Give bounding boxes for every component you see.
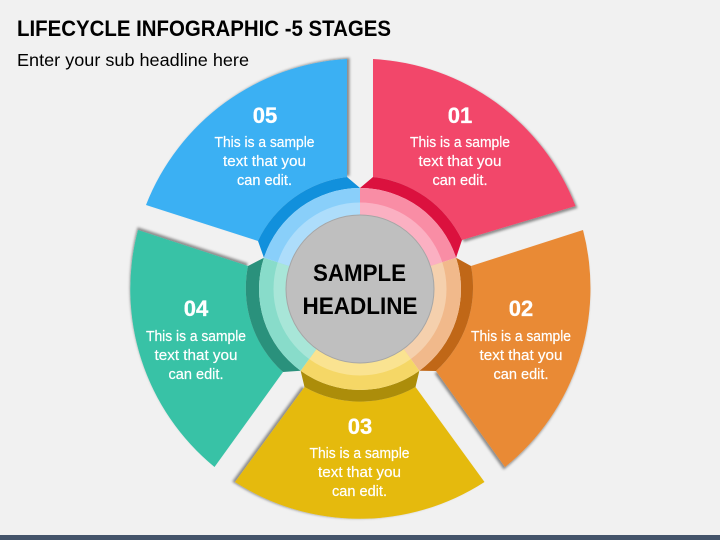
segment 05: blue: 05	[253, 103, 277, 128]
sub headline: Enter your sub headline here	[17, 50, 249, 70]
segment 05: blue	[146, 59, 360, 289]
segment 03: yellow: text that you	[318, 465, 401, 481]
center circle with headline	[286, 215, 434, 363]
segment 03: yellow: can edit.	[332, 484, 387, 500]
segment 04: teal: This is a sample	[146, 329, 246, 345]
segment 02: orange: This is a sample	[471, 329, 571, 345]
segment 03: yellow: 03	[348, 414, 372, 439]
bottom bar	[0, 535, 720, 540]
segment 02: orange: 02	[509, 296, 533, 321]
segment 04: teal: 04	[184, 296, 209, 321]
title: LIFECYCLE INFOGRAPHIC -5 STAGES	[17, 16, 391, 41]
segment 02: orange: text that you	[480, 348, 562, 364]
segment 05: blue: can edit.	[237, 173, 292, 189]
segment 04: teal	[130, 230, 360, 467]
segment 04: teal: can edit.	[168, 367, 224, 383]
segment 01: red: This is a sample	[410, 135, 510, 151]
center circle with headline: SAMPLE	[313, 260, 406, 287]
segment 05: blue: text that you	[223, 154, 306, 170]
segment 01: red: can edit.	[432, 173, 488, 189]
segment 01: red	[360, 59, 576, 289]
segment 04: teal: text that you	[154, 348, 238, 364]
segment 02: orange: can edit.	[494, 367, 548, 383]
segment 03: yellow: This is a sample	[310, 446, 410, 462]
segment 01: red: text that you	[418, 154, 502, 170]
segment 05: blue: This is a sample	[214, 135, 314, 151]
center circle with headline: HEADLINE	[302, 293, 418, 320]
segment 01: red: 01	[448, 103, 472, 128]
segment 03: yellow	[235, 289, 484, 519]
segment 02: orange	[360, 230, 590, 467]
